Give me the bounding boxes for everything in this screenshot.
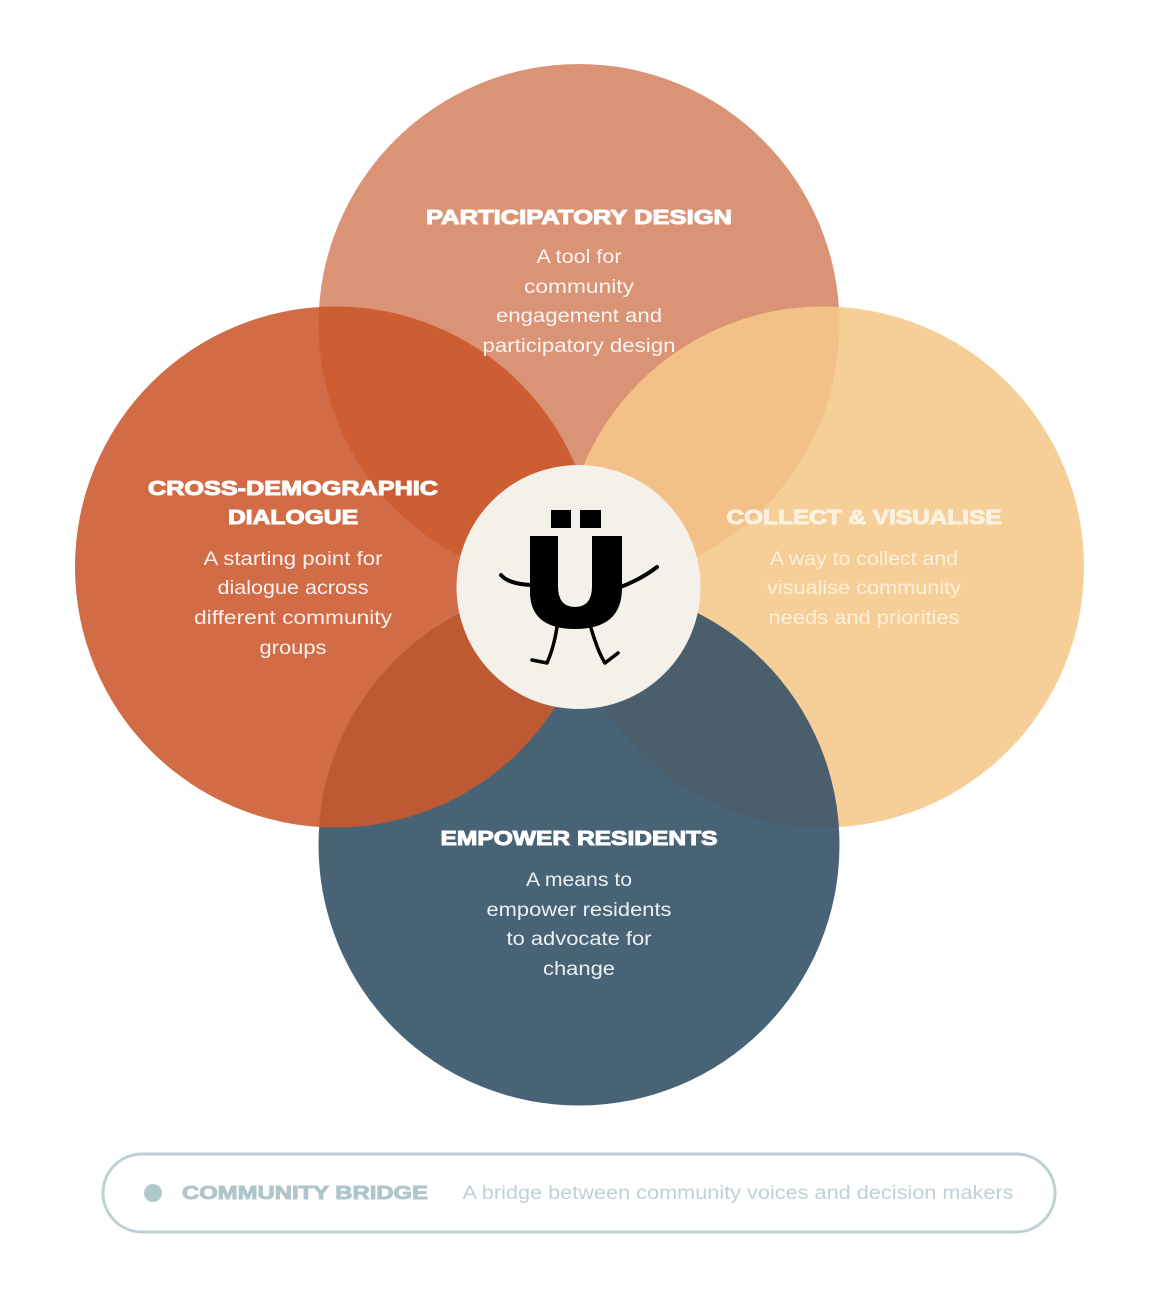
- mascot legs: [532, 620, 618, 663]
- overlap: visualise and empower: [604, 613, 839, 828]
- description: participatory design: participatory design: [482, 336, 676, 357]
- text block: participatory design: [426, 206, 732, 357]
- heading: cross-demographic dialogue: DIALOGUE: [228, 506, 358, 529]
- legend: community bridge: [103, 1154, 1055, 1232]
- description: cross-demographic dialogue: groups: [260, 638, 326, 659]
- center circle: [456, 465, 700, 709]
- overlap: participatory and visualise: [584, 306, 840, 556]
- description: empower residents: change: [543, 959, 615, 980]
- legend description: A bridge between community voices and decision makers: [462, 1183, 1014, 1204]
- panel: empower residents circle: [318, 584, 840, 1106]
- description: cross-demographic dialogue: dialogue across: [218, 578, 368, 599]
- description: collect and visualise: visualise community: [767, 578, 962, 599]
- heading: cross-demographic dialogue: [148, 477, 438, 529]
- description: participatory design: [482, 247, 676, 357]
- heading: cross-demographic dialogue: CROSS-DEMOGRAPHIC: [148, 477, 438, 500]
- description: empower residents: empower residents: [486, 900, 672, 921]
- description: collect and visualise: [767, 549, 962, 629]
- icon: letter U mascot with arms and legs: [501, 510, 657, 663]
- mascot letter U body: [530, 536, 622, 629]
- description: cross-demographic dialogue: different community: [194, 608, 393, 629]
- legend heading: COMMUNITY BRIDGE: [182, 1182, 428, 1203]
- panel: participatory design circle: [318, 64, 840, 585]
- text block: cross-demographic dialogue: [148, 477, 438, 659]
- description: cross-demographic dialogue: [194, 549, 393, 659]
- overlap: participatory and dialogue: [318, 306, 575, 556]
- legend pill outline: [103, 1154, 1055, 1232]
- heading: empower residents: EMPOWER RESIDENTS: [440, 827, 718, 850]
- mascot umlaut dots: [551, 510, 601, 528]
- description: empower residents: to advocate for: [506, 929, 652, 950]
- heading: participatory design: PARTICIPATORY DESIGN: [426, 206, 732, 229]
- description: collect and visualise: needs and priorities: [768, 608, 960, 629]
- description: participatory design: community: [524, 277, 635, 298]
- panel: cross-demographic dialogue circle: [75, 306, 596, 828]
- description: cross-demographic dialogue: A starting point for: [204, 549, 383, 570]
- panel: collect and visualise circle: [563, 306, 1084, 828]
- text block: empower residents: [440, 827, 718, 980]
- description: empower residents: A means to: [526, 870, 632, 891]
- description: participatory design: engagement and: [496, 306, 662, 327]
- mascot arms: [501, 567, 657, 588]
- text block: collect and visualise: [726, 506, 1002, 629]
- legend dot: [144, 1184, 162, 1202]
- description: collect and visualise: A way to collect and: [770, 549, 958, 570]
- overlap: dialogue and empower: [319, 614, 556, 828]
- heading: collect and visualise: COLLECT & VISUALISE: [726, 506, 1002, 529]
- description: participatory design: A tool for: [536, 247, 622, 268]
- description: empower residents: [486, 870, 672, 980]
